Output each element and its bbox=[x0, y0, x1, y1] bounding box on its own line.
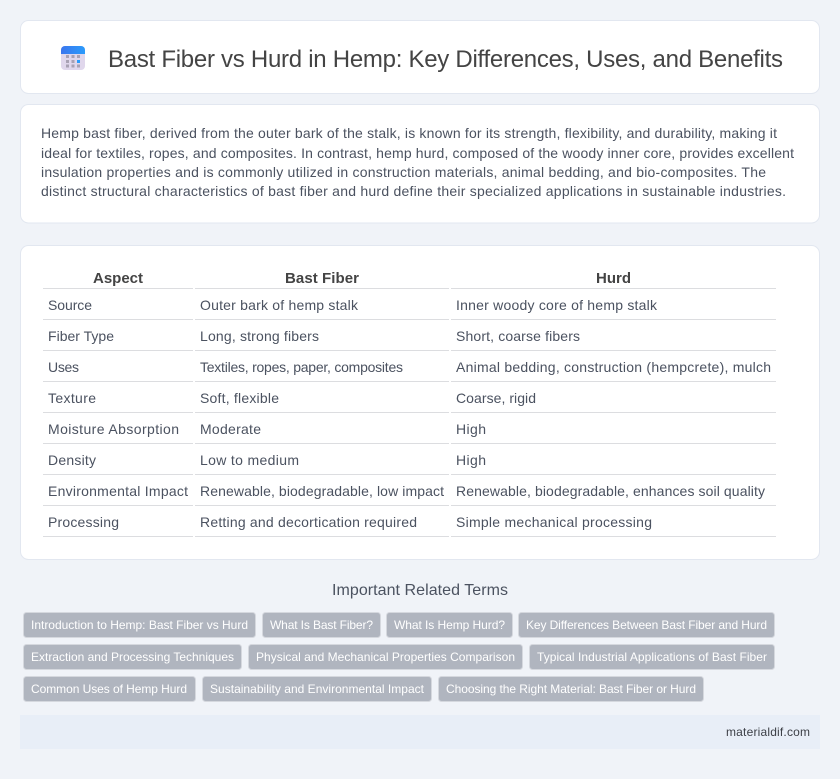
table header bbox=[93, 270, 631, 287]
table header: Aspect bbox=[93, 270, 143, 287]
text block: intro bbox=[41, 125, 794, 199]
row: Density: High bbox=[456, 452, 486, 468]
tag: What Is Hemp Hurd? bbox=[394, 618, 505, 632]
row: Environmental Impact: Renewable, biodegradable, enhances soil quality bbox=[456, 483, 765, 499]
row: Texture bbox=[48, 390, 536, 406]
footer: materialdif.com bbox=[726, 725, 810, 739]
row: Source: Outer bark of hemp stalk bbox=[200, 297, 359, 313]
tag bbox=[24, 644, 242, 670]
panel: comparison table bbox=[20, 246, 820, 560]
tag bbox=[24, 676, 196, 702]
text block: intro: insulation properties and is commonly utilized in construction materials, animal bedding, and bio-composites. The bbox=[41, 164, 766, 180]
row: Processing: Retting and decortication required bbox=[200, 514, 417, 530]
row: Processing: Simple mechanical processing bbox=[456, 514, 652, 530]
tag: Extraction and Processing Techniques bbox=[31, 650, 234, 664]
text block: intro: Hemp bast fiber, derived from the outer bark of the stalk, is known for its strength, flexibility, and durability, making it bbox=[41, 125, 777, 141]
row: Fiber Type: Short, coarse fibers bbox=[456, 328, 580, 344]
text block: intro: distinct structural characteristics of bast fiber and hurd define their specialized applications in sustainable industries. bbox=[41, 183, 786, 199]
tag: Common Uses of Hemp Hurd bbox=[31, 682, 187, 696]
row: Density: Low to medium bbox=[200, 452, 299, 468]
panel: header bbox=[20, 20, 820, 94]
panel: intro paragraph bbox=[20, 104, 820, 223]
heading: related terms: Important Related Terms bbox=[332, 582, 508, 599]
tag: Introduction to Hemp: Bast Fiber vs Hurd bbox=[31, 618, 248, 632]
row: Fiber Type: Long, strong fibers bbox=[200, 328, 319, 344]
row: Density: Density bbox=[48, 452, 96, 468]
tag bbox=[438, 676, 704, 702]
row: Source: Source bbox=[48, 297, 92, 313]
row: Moisture Absorption: Moisture Absorption bbox=[48, 421, 179, 437]
tag: Sustainability and Environmental Impact bbox=[210, 682, 425, 696]
row: Uses: Textiles, ropes, paper, composites bbox=[200, 359, 403, 375]
row: Moisture Absorption: Moderate bbox=[200, 421, 261, 437]
text block: intro: ideal for textiles, ropes, and composites. In contrast, hemp hurd, composed of the woody inner core, provides excellent bbox=[41, 145, 794, 161]
tag bbox=[530, 644, 774, 670]
icon: calendar bbox=[61, 46, 85, 70]
tag: Choosing the Right Material: Bast Fiber or Hurd bbox=[446, 682, 696, 696]
row: Moisture Absorption: High bbox=[456, 421, 486, 437]
row: Processing: Processing bbox=[48, 514, 119, 530]
row: Source bbox=[48, 297, 658, 313]
row: Density bbox=[48, 452, 486, 468]
tag: Key Differences Between Bast Fiber and Hurd bbox=[526, 618, 767, 632]
row: Processing bbox=[48, 514, 652, 530]
row: Uses bbox=[48, 359, 771, 375]
footer bbox=[20, 715, 820, 749]
row: Fiber Type: Fiber Type bbox=[48, 328, 114, 344]
row: Texture: Soft, flexible bbox=[200, 390, 279, 406]
tag bbox=[518, 612, 774, 638]
row: Source: Inner woody core of hemp stalk bbox=[456, 297, 658, 313]
row: Environmental Impact: Renewable, biodegradable, low impact bbox=[200, 483, 444, 499]
row: Texture: Texture bbox=[48, 390, 96, 406]
row: Fiber Type bbox=[48, 328, 580, 344]
tag bbox=[202, 676, 432, 702]
tag bbox=[248, 644, 522, 670]
related terms tags bbox=[24, 612, 774, 702]
row: Uses: Animal bedding, construction (hempcrete), mulch bbox=[456, 359, 771, 375]
row: Moisture Absorption bbox=[48, 421, 486, 437]
tag bbox=[24, 612, 256, 638]
tag bbox=[262, 612, 380, 638]
title: Bast Fiber vs Hurd in Hemp: Key Differences, Uses, and Benefits bbox=[108, 46, 783, 73]
row: Uses: Uses bbox=[48, 359, 79, 375]
row: Environmental Impact: Environmental Impact bbox=[48, 483, 188, 499]
tag: What Is Bast Fiber? bbox=[270, 618, 373, 632]
row: Environmental Impact bbox=[48, 483, 765, 499]
tag bbox=[386, 612, 512, 638]
tag: Typical Industrial Applications of Bast Fiber bbox=[537, 650, 767, 664]
tag: Physical and Mechanical Properties Comparison bbox=[256, 650, 515, 664]
table header: Hurd bbox=[596, 270, 631, 287]
table header: Bast Fiber bbox=[285, 270, 359, 287]
row: Texture: Coarse, rigid bbox=[456, 390, 536, 406]
